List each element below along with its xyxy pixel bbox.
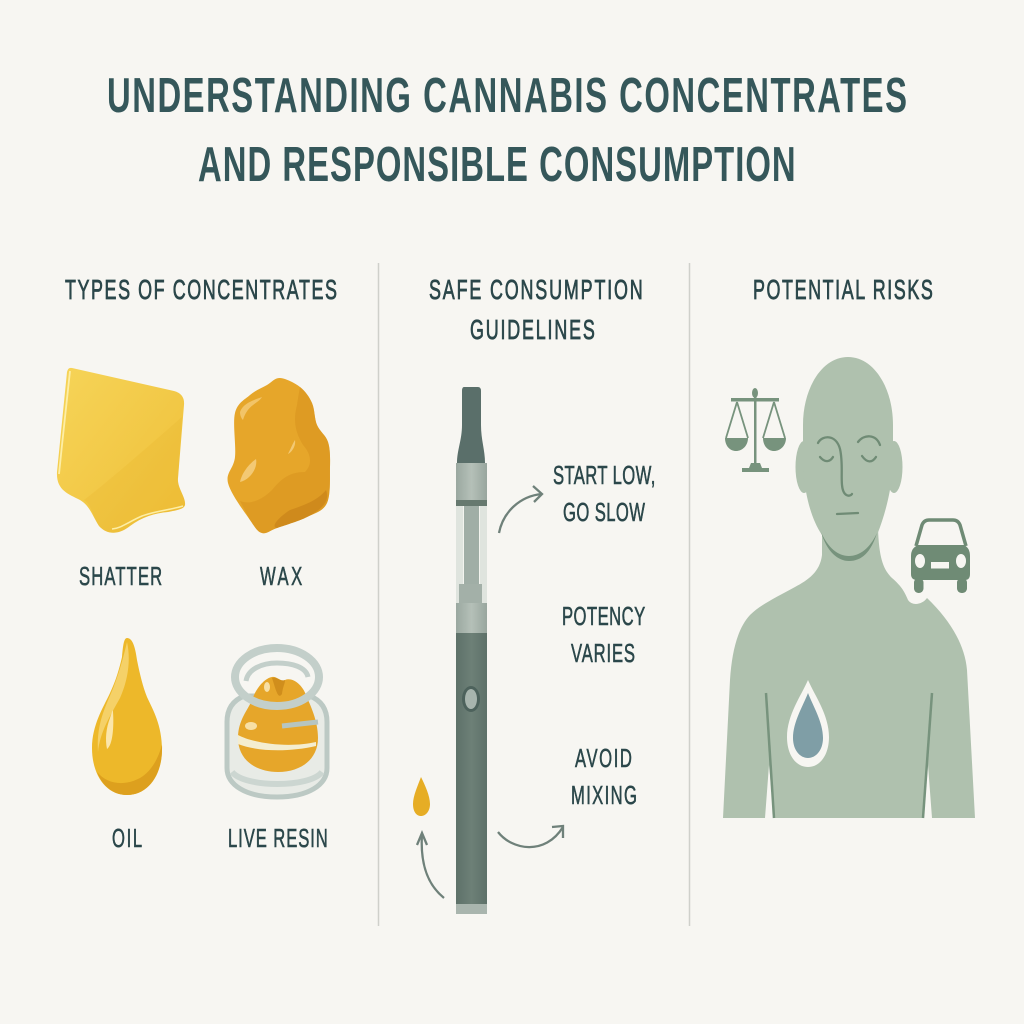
icon: shatter	[57, 368, 185, 533]
text: avoid mixing: MIXING	[571, 780, 637, 810]
text: start low, go slow	[553, 460, 655, 527]
icon: scales	[725, 388, 786, 472]
text: avoid mixing: AVOID	[575, 743, 632, 773]
icon: chest drop	[787, 680, 829, 767]
icon: human figure	[723, 357, 975, 818]
icon: vape pen	[456, 387, 487, 914]
text: potency varies	[562, 601, 646, 668]
heading: types of concentrates: TYPES OF CONCENTRATES	[65, 274, 337, 305]
text: potency varies: POTENCY	[562, 601, 646, 631]
icon: small oil drop	[413, 777, 430, 816]
arrow: to start low	[499, 486, 542, 533]
label: oil: OIL	[112, 823, 142, 853]
text: potency varies: VARIES	[571, 638, 635, 668]
text: start low, go slow: GO SLOW	[563, 497, 645, 527]
label: shatter: SHATTER	[79, 561, 162, 591]
icon: car	[911, 520, 970, 593]
heading: potential risks: POTENTIAL RISKS	[753, 274, 933, 305]
title: AND RESPONSIBLE CONSUMPTION	[198, 136, 796, 192]
label: live resin: LIVE RESIN	[228, 823, 328, 853]
title	[107, 67, 907, 192]
icon: oil drop	[92, 638, 162, 795]
title: UNDERSTANDING CANNABIS CONCENTRATES	[107, 67, 907, 123]
text: avoid mixing	[571, 743, 637, 810]
arrow: to avoid mixing	[498, 826, 563, 847]
text: start low, go slow: START LOW,	[553, 460, 655, 490]
panel: potential risks	[723, 274, 975, 818]
panel: types of concentrates	[57, 274, 337, 853]
heading: safe consumption guidelines	[429, 274, 643, 345]
arrow: to drop	[417, 833, 444, 898]
icon: wax	[228, 378, 330, 533]
icon: live resin jar	[227, 648, 327, 797]
heading: safe consumption guidelines: GUIDELINES	[470, 314, 595, 345]
heading: safe consumption guidelines: SAFE CONSUMPTION	[429, 274, 643, 305]
label: wax: WAX	[260, 561, 303, 591]
panel: safe consumption guidelines	[413, 274, 655, 914]
